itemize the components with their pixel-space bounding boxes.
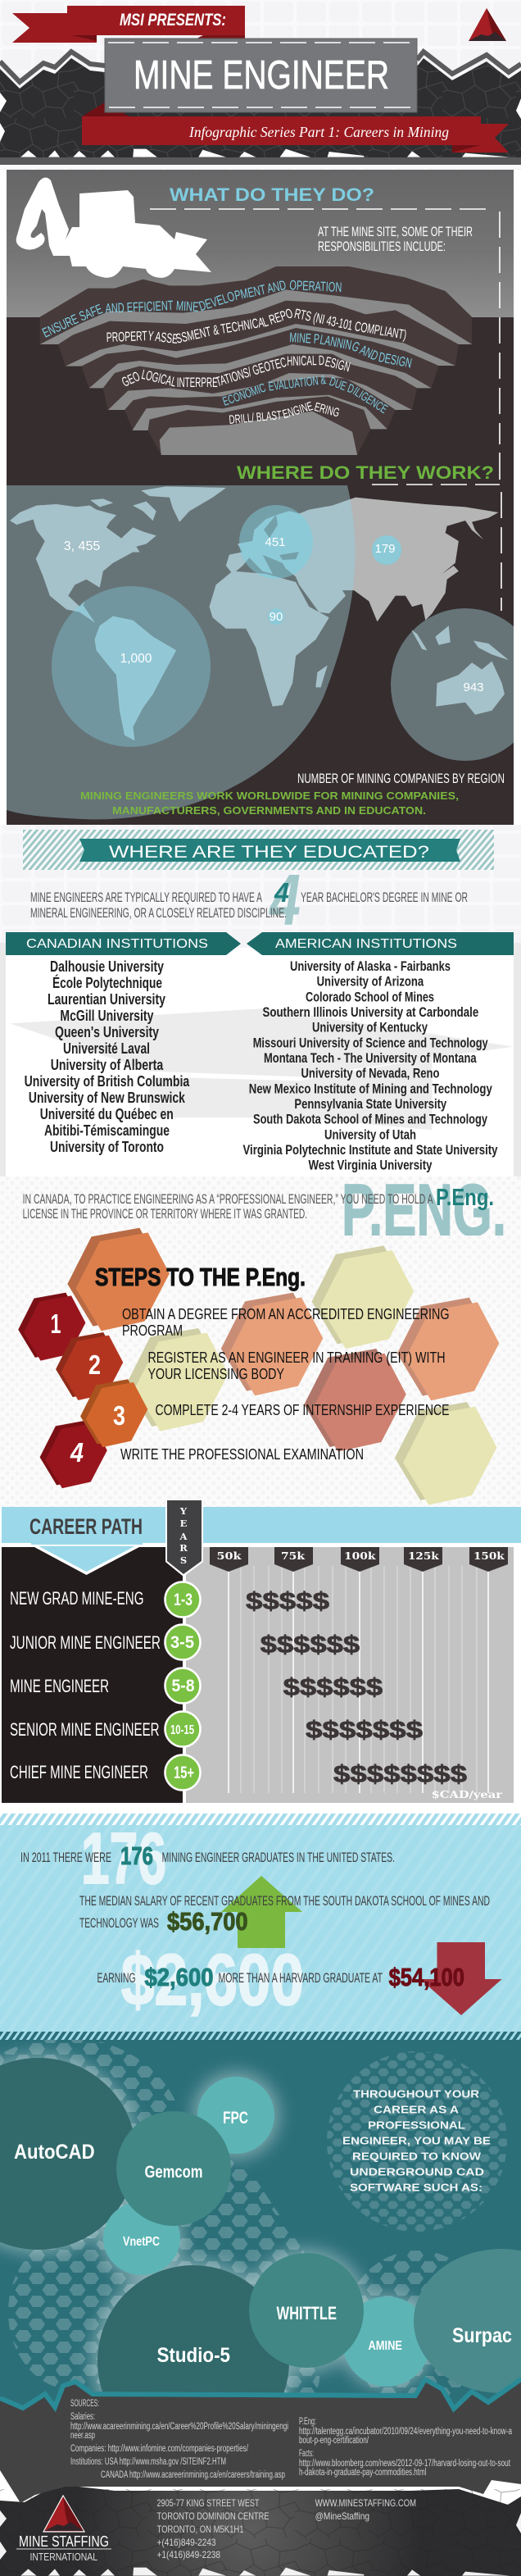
banner: MSI presents (12, 6, 245, 43)
years column: E (180, 1518, 188, 1529)
step numbers: 4 (70, 1437, 84, 1468)
heading ribbon (23, 830, 494, 870)
big numeral 4: 4 (268, 859, 301, 940)
step descriptions: OBTAIN A DEGREE FROM AN ACCREDITED ENGINEERING (122, 1306, 449, 1322)
region counts: 451 (265, 535, 286, 549)
footer logo: Mine Staffing International (16, 2496, 111, 2563)
big 2,600: $2,600 (121, 1939, 304, 2020)
salary tick tags: 50k (216, 1550, 242, 1562)
salary bars made of dollar signs: $$$$$$ (260, 1632, 360, 1659)
banner: infographic series (82, 102, 509, 152)
text: responsibilities intro (318, 224, 473, 254)
header: canadian institutions (6, 932, 241, 955)
footer web links (315, 2497, 416, 2522)
responsibilities curved labels: DRILL/ BLAST ENGINEERING (229, 402, 339, 424)
region counts: 943 (463, 680, 484, 694)
header rock band (0, 52, 521, 165)
fact text: IN 2011 THERE WERE (20, 1850, 111, 1865)
dark role column (2, 1547, 183, 1803)
fact text: MORE THAN A HARVARD GRADUATE AT (218, 1970, 383, 1986)
source links: neer.asp (70, 2431, 95, 2441)
numbered hexagons (18, 1293, 147, 1488)
responsibilities curved labels: MINE PLANNING AND DESIGN (290, 333, 412, 367)
region counts: 90 (270, 610, 283, 624)
band: light blue header (2, 1507, 521, 1543)
chart background (186, 1547, 514, 1803)
list: american institutions: Pennsylvania State University (294, 1096, 447, 1112)
hexagon texture and glow (0, 2040, 507, 2398)
section: CAD software (0, 2032, 521, 2409)
title box: MINE ENGINEER (134, 53, 389, 98)
header: canadian institutions: CANADIAN INSTITUTIONS (26, 937, 208, 951)
footer rock band (0, 2474, 521, 2576)
footer web links: WWW.MINESTAFFING.COM (315, 2497, 416, 2509)
source links: Companies: http://www.infomine.com/companies-properties/ (70, 2444, 249, 2454)
role labels (10, 1588, 161, 1782)
years badges: 10-15 (170, 1723, 194, 1737)
axis unit: $CAD/year (432, 1788, 502, 1800)
source links: Facts: (299, 2449, 314, 2459)
source links: CANADA http://www.acareerinmining.ca/en/careers/training.asp (101, 2470, 285, 2480)
footer logo: Mine Staffing International: MINE STAFFING (19, 2533, 109, 2550)
big numeral 4: 4 (274, 877, 289, 908)
list: canadian institutions: University of New Brunswick (29, 1090, 186, 1106)
text: CAD software note: ENGINEER, YOU MAY BE (342, 2136, 491, 2147)
list: american institutions: University of Arizona (317, 974, 424, 990)
responsibilities curved labels: ENSURE SAFE AND EFFICIENT MINE DEVELOPMENT AND OPERATION (42, 280, 342, 338)
footer address: TORONTO, ON M5K1H1 (157, 2524, 244, 2535)
years column (165, 1500, 203, 1577)
text: CAD software note: PROFESSIONAL (368, 2120, 465, 2132)
role labels: SENIOR MINE ENGINEER (10, 1719, 159, 1740)
role labels: MINE ENGINEER (10, 1676, 109, 1696)
salary bars made of dollar signs: $$$$$$$$ (333, 1761, 467, 1788)
text: degree requirement: MINERAL ENGINEERING, OR A CLOSELY RELATED DISCIPLINE. (30, 905, 287, 921)
years badges: 15+ (174, 1764, 194, 1782)
arrow: down (420, 1942, 502, 2015)
emphasised figures: $56,700 (167, 1907, 248, 1936)
institutions panel background (6, 955, 514, 1176)
years column: Y (179, 1505, 188, 1517)
salary tick tags: 100k (344, 1550, 376, 1562)
software labels: FPC (223, 2109, 248, 2128)
footer address: 2905-77 KING STREET WEST (157, 2497, 260, 2509)
world map (7, 485, 521, 819)
role labels: JUNIOR MINE ENGINEER (10, 1632, 161, 1653)
text: licence requirement: LICENSE IN THE PROVINCE OR TERRITORY WHERE IT WAS GRANTED. (23, 1206, 307, 1222)
years badges: 3-5 (170, 1633, 194, 1652)
section: P.Eng licence (0, 1170, 521, 1507)
region counts: 3, 455 (64, 539, 100, 553)
role labels: CHIEF MINE ENGINEER (10, 1762, 148, 1782)
section: career path (0, 1500, 521, 1814)
footer address: +(416)849-2243 (157, 2537, 216, 2548)
salary bars made of dollar signs: $$$$$ (246, 1588, 329, 1615)
text: responsibilities intro: RESPONSIBILITIES INCLUDE: (318, 239, 446, 254)
footer logo: Mine Staffing International: INTERNATIONAL (29, 2551, 97, 2563)
salary bars made of dollar signs: $$$$$$$ (306, 1717, 423, 1744)
software labels: Studio-5 (157, 2344, 230, 2367)
list: canadian institutions: Université Laval (63, 1040, 150, 1057)
step numbers: 1 (51, 1308, 61, 1339)
connector (183, 1574, 186, 1803)
text: green employers note: MINING ENGINEERS WORK WORLDWIDE FOR MINING COMPANIES, (80, 790, 459, 802)
salary bars made of dollar signs: $$$$$$ (283, 1674, 383, 1701)
source links: P.Eng: (299, 2417, 316, 2427)
list: canadian institutions (25, 958, 190, 1155)
step descriptions: REGISTER AS AN ENGINEER IN TRAINING (EIT) WITH (147, 1349, 446, 1366)
list: american institutions: West Virginia University (308, 1158, 433, 1173)
salary tick tags: 75k (281, 1550, 306, 1562)
source links: Institutions: USA http://www.msha.gov /SITEINF2.HTM (70, 2457, 226, 2467)
salary tick tags: 150k (473, 1550, 505, 1562)
step descriptions (120, 1306, 449, 1463)
responsibilities curved labels: ECONOMIC EVALUATION & DUE DILIGENCE (222, 375, 388, 413)
years column: R (179, 1542, 188, 1554)
software bubbles (0, 2058, 521, 2397)
salary tick tags: 125k (408, 1550, 439, 1562)
panel: what do they do (7, 170, 514, 825)
panel: where do they work (7, 462, 521, 819)
source links: SOURCES: (70, 2399, 99, 2409)
role labels: NEW GRAD MINE-ENG (10, 1588, 144, 1609)
region counts (64, 535, 484, 694)
step descriptions: YOUR LICENSING BODY (147, 1366, 284, 1382)
step numbers (51, 1308, 125, 1468)
step numbers: 2 (88, 1349, 101, 1380)
years badges (165, 1582, 200, 1791)
text: licence requirement (23, 1191, 433, 1222)
region counts: 179 (374, 542, 396, 556)
years badges: 5-8 (172, 1677, 195, 1695)
step descriptions: PROGRAM (122, 1322, 183, 1339)
list: canadian institutions: Queen's University (55, 1024, 159, 1040)
chart grid lines (229, 1566, 488, 1793)
footer address: +1(416)849-2238 (157, 2549, 220, 2560)
years badges: 1-3 (174, 1591, 193, 1609)
step descriptions: WRITE THE PROFESSIONAL EXAMINATION (120, 1446, 364, 1463)
step numbers: 3 (113, 1400, 125, 1431)
fact text: EARNING (97, 1970, 136, 1986)
list: canadian institutions: Abitibi-Témiscamingue (44, 1122, 170, 1139)
dashed rule (150, 209, 501, 611)
software labels: VnetPC (123, 2235, 160, 2249)
years column: S (180, 1554, 187, 1566)
source links: h-dakota-in-graduate-pay-commodities.html (299, 2468, 426, 2478)
heading: what do they do: WHAT DO THEY DO? (170, 184, 374, 205)
software labels: AMINE (369, 2339, 402, 2353)
text: CAD software note: SOFTWARE SUCH AS: (350, 2182, 482, 2194)
software labels: WHITTLE (277, 2303, 337, 2323)
text: CAD software note (342, 2088, 491, 2194)
list: canadian institutions: University of Toronto (50, 1139, 164, 1155)
icon: triangle logo top right (469, 8, 506, 41)
list: canadian institutions: University of British Columbia (25, 1073, 190, 1090)
big 176: 176 (81, 1818, 166, 1899)
fact text: TECHNOLOGY WAS (79, 1915, 159, 1931)
region counts: 1,000 (120, 652, 152, 666)
list: american institutions: University of Alaska - Fairbanks (290, 958, 451, 974)
list: canadian institutions: Laurentian University (48, 991, 165, 1008)
text: CAD software note: CAREER AS A (374, 2105, 459, 2116)
emphasised figures: 176 (120, 1841, 153, 1870)
list: american institutions: University of Nevada, Reno (301, 1066, 439, 1081)
arrow: up (221, 1876, 302, 1948)
heading ribbon: WHERE ARE THEY EDUCATED? (109, 842, 429, 862)
source links: http://www.acareerinmining.ca/en/Career%20Profile%20Salary/miningengi (70, 2422, 288, 2432)
list: american institutions: University of Utah (324, 1126, 416, 1142)
title box (105, 39, 417, 112)
source links: bout-p-eng-certification/ (299, 2436, 369, 2446)
text: CAD software note: UNDERGROUND CAD (350, 2167, 484, 2178)
header: american institutions: AMERICAN INSTITUTIONS (275, 937, 457, 951)
text: degree requirement: MINE ENGINEERS ARE TYPICALLY REQUIRED TO HAVE A (30, 890, 262, 905)
list: canadian institutions: McGill University (60, 1008, 153, 1024)
years column: A (179, 1531, 188, 1542)
software labels: Surpac (452, 2324, 512, 2347)
section: graduate facts (0, 1814, 521, 2032)
emphasised figures (120, 1841, 464, 1991)
list: canadian institutions: Dalhousie University (50, 958, 164, 975)
footer address: TORONTO DOMINION CENTRE (157, 2510, 269, 2522)
list: canadian institutions: École Polytechnique (52, 974, 162, 991)
footer address (157, 2497, 269, 2560)
list: american institutions (242, 958, 498, 1173)
text: green employers note (80, 790, 459, 817)
salary bars made of dollar signs (246, 1588, 467, 1788)
decorative hexagons (67, 1228, 499, 1505)
responsibilities curved labels (42, 280, 412, 424)
software labels: AutoCAD (14, 2141, 95, 2164)
responsibilities curved labels: GEOLOGICAL INTERPRETATIONS/ GEOTECHNICAL DESIGN (122, 356, 351, 387)
software labels (14, 2109, 512, 2367)
chevron (31, 1541, 143, 1573)
icon: excavator silhouette (16, 177, 211, 278)
source links (70, 2399, 512, 2480)
section: where are they educated (0, 825, 521, 1176)
list: american institutions: Colorado School of Mines (306, 989, 434, 1004)
text: degree requirement (30, 890, 468, 921)
fact text (20, 1850, 490, 1986)
responsibilities curved labels: PROPERTY ASSESSMENT & TECHNICAL REPORTS (NI 43-101 COMPLIANT) (106, 308, 406, 344)
list: canadian institutions: University of Alberta (51, 1057, 164, 1073)
banner: infographic series: Infographic Series Part 1: Careers in Mining (188, 124, 449, 140)
heading: career path: CAREER PATH (29, 1514, 143, 1539)
emphasised figures: $2,600 (144, 1963, 213, 1991)
emphasised figures: $54,100 (389, 1963, 464, 1991)
banner: MSI presents: MSI PRESENTS: (120, 11, 226, 30)
text: CAD software note: REQUIRED TO KNOW (352, 2151, 481, 2163)
salary tick tags (210, 1547, 508, 1572)
sources panel (0, 2379, 521, 2503)
text: green employers note: MANUFACTURERS, GOVERNMENTS AND IN EDUCATON. (112, 805, 426, 817)
source links: Salaries: (70, 2412, 95, 2422)
header: american institutions (247, 932, 514, 955)
small P.Eng: P.Eng. (436, 1185, 494, 1211)
heading: steps to the P.Eng: STEPS TO THE P.Eng. (95, 1263, 306, 1291)
footer web links: @MineStaffing (315, 2510, 369, 2522)
list: american institutions: University of Kentucky (312, 1020, 428, 1035)
software labels: Gemcom (144, 2163, 203, 2182)
text: CAD software note: THROUGHOUT YOUR (353, 2088, 479, 2100)
heading: where do they work: WHERE DO THEY WORK? (237, 462, 494, 483)
mine pit terraces (40, 266, 472, 455)
list: canadian institutions: Université du Québec en (40, 1106, 174, 1122)
